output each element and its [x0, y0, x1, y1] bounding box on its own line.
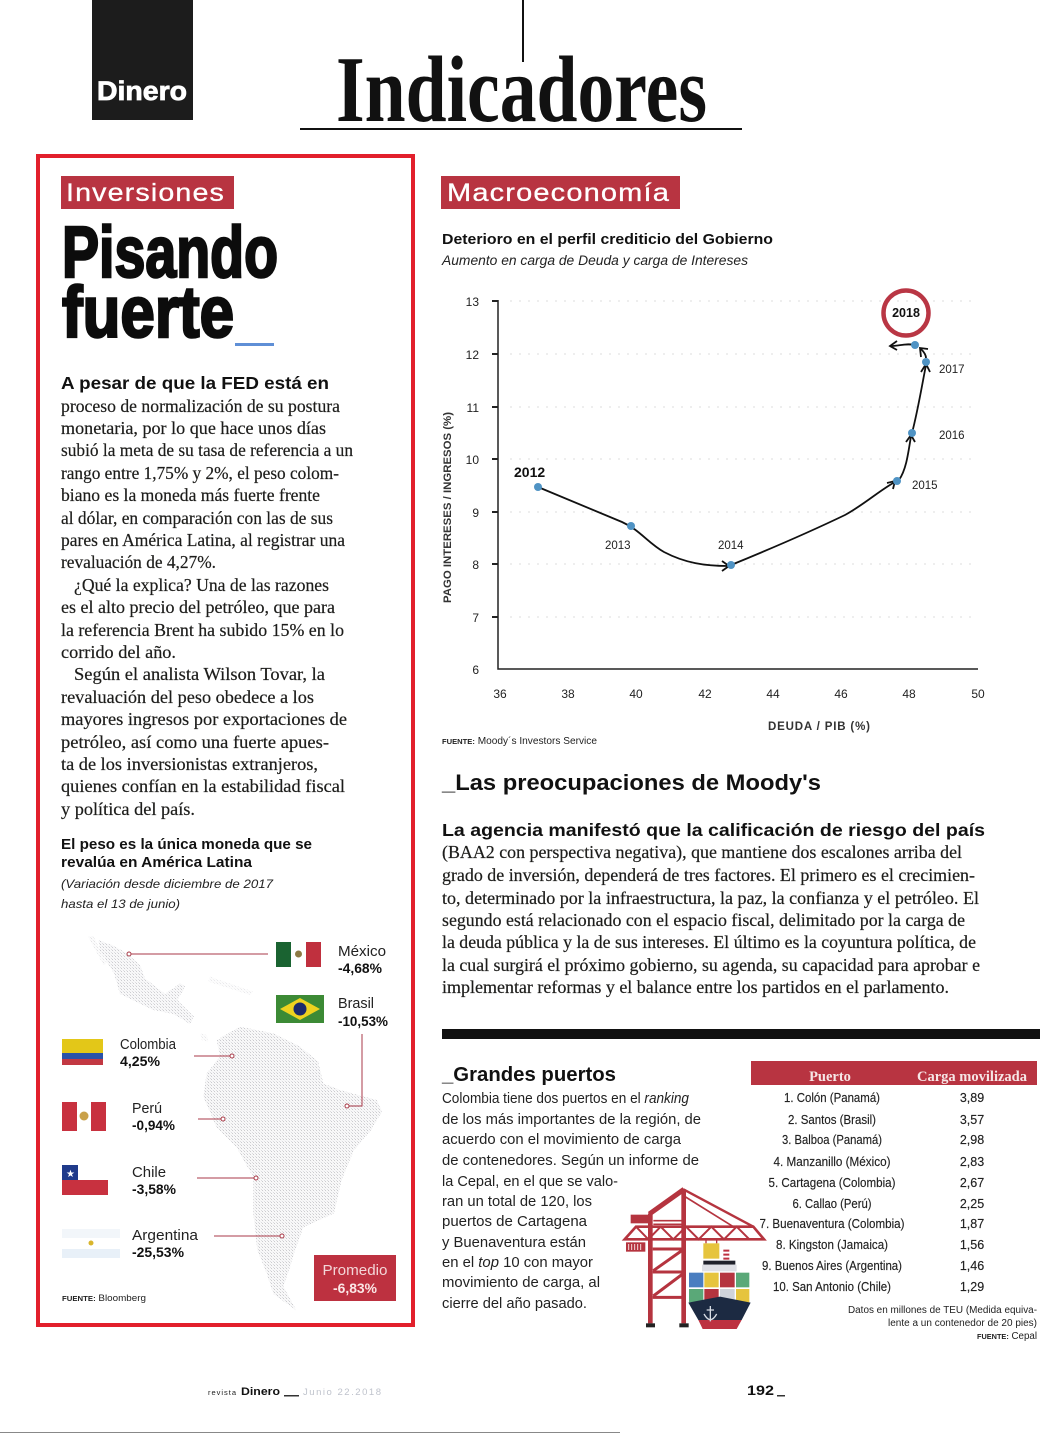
- year labels: 2014: [718, 540, 744, 552]
- table: puertos: [751, 1061, 1037, 1342]
- flag: Chile: ★: [66, 1169, 75, 1180]
- flag: México: [276, 942, 321, 967]
- source: Moody's: FUENTE: Moody´s Investors Service: [442, 735, 597, 747]
- Dinero tab: Dinero: [97, 76, 187, 106]
- text block: puertos: en el top 10 con mayor: [442, 1255, 593, 1271]
- article text: biano es la moneda más fuerte frente: [61, 485, 320, 505]
- label: Brasil: Brasil: [338, 996, 374, 1012]
- panel: inversiones: [38, 156, 413, 1325]
- map: Latin America dotted: [88, 936, 382, 1311]
- text block: Moody's: la deuda pública y la de sus intereses. El último es la coyuntura política, de: [442, 932, 976, 952]
- flag: Argentina: [62, 1229, 120, 1258]
- 2018 highlight circle: 2018: [892, 306, 920, 320]
- map heading: revalúa en América Latina: [61, 855, 253, 871]
- year labels: [514, 364, 965, 552]
- section tag: Inversiones: Inversiones: [66, 179, 225, 207]
- icon: crane and container ship: [625, 1189, 764, 1329]
- y axis values: 11: [467, 401, 479, 415]
- table rows: 10. San Antonio (Chile): [773, 1280, 891, 1294]
- map heading: [61, 837, 312, 911]
- map heading: hasta el 13 de junio): [61, 897, 180, 911]
- text block: puertos: movimiento de carga, al: [442, 1275, 600, 1291]
- table note and source: Datos en millones de TEU (Medida equiva-: [848, 1305, 1037, 1316]
- table rows: 3,57: [960, 1113, 984, 1127]
- table header: [751, 1061, 1037, 1085]
- label: Brasil: [338, 996, 388, 1029]
- flag: Chile: [62, 1165, 108, 1195]
- section tag: Macroeconomía: [441, 176, 680, 209]
- x axis values: 40: [629, 687, 643, 701]
- year labels: 2015: [912, 480, 938, 492]
- header: page tag and title: [92, 0, 742, 142]
- article text: corrido del año.: [61, 642, 176, 662]
- chart heading: Aumento en carga de Deuda y carga de Intereses: [441, 253, 748, 268]
- text block: Moody's: implementar reformas y el balance entre los partidos en el parlamento.: [442, 977, 949, 997]
- x axis values: 38: [561, 687, 575, 701]
- table rows: 2,25: [960, 1197, 984, 1211]
- text block: puertos: acuerdo con el movimiento de carga: [442, 1132, 682, 1148]
- text block: puertos: ran un total de 120, los: [442, 1194, 592, 1210]
- article text: petróleo, así como una fuerte apues-: [61, 732, 329, 752]
- curve with arrows: [538, 341, 930, 571]
- article text: la referencia Brent ha subido 15% en lo: [61, 620, 344, 640]
- text block: puertos: [442, 1091, 701, 1312]
- map connectors: [127, 952, 362, 1238]
- table rows: 2,67: [960, 1176, 984, 1190]
- article text: quienes confían en la estabilidad fiscal: [61, 776, 345, 796]
- headline: fuerte: [62, 273, 234, 353]
- y axis values: 9: [472, 506, 479, 520]
- table rows: 1,46: [960, 1259, 984, 1273]
- map heading: El peso es la única moneda que se: [61, 837, 312, 853]
- table rows: 1,56: [960, 1238, 984, 1252]
- label: México: [338, 944, 386, 976]
- x axis values: 36: [493, 687, 507, 701]
- table note and source: lente a un contenedor de 20 pies): [888, 1318, 1037, 1329]
- article text: y política del país.: [61, 799, 195, 819]
- x axis values: 46: [834, 687, 848, 701]
- callout: promedio: Promedio: [322, 1262, 388, 1279]
- label: Colombia: Colombia: [120, 1037, 177, 1053]
- table rows: 1. Colón (Panamá): [784, 1091, 880, 1105]
- text block: Moody's: (BAA2 con perspectiva negativa), que mantiene dos escalones arriba del: [442, 842, 962, 862]
- label: Chile: -3,58%: [132, 1182, 176, 1197]
- article text: ta de los inversionistas extranjeros,: [61, 754, 318, 774]
- text block: puertos: y Buenaventura están: [442, 1235, 586, 1251]
- table note and source: [848, 1305, 1037, 1342]
- 2018 highlight circle: [884, 290, 928, 336]
- text block: Moody's: grado de inversión, dependerá de tres factores. El primero es el crecimien-: [442, 865, 975, 885]
- article text: rango entre 1,75% y 2%, el peso colom-: [61, 463, 339, 483]
- data points: [534, 341, 930, 569]
- table rows: 8. Kingston (Jamaica): [776, 1238, 888, 1252]
- footer: [208, 1382, 785, 1398]
- text block: puertos: puertos de Cartagena: [442, 1214, 588, 1230]
- table header: Puerto: [809, 1069, 851, 1085]
- table rows: 6. Callao (Perú): [792, 1197, 872, 1211]
- table rows: 1,87: [960, 1217, 984, 1231]
- text block: puertos: Colombia tiene dos puertos en el ranking: [442, 1091, 689, 1107]
- table rows: 2,98: [960, 1133, 984, 1147]
- year labels: 2012: [514, 464, 545, 480]
- text block: puertos: de los más importantes de la región, de: [442, 1112, 701, 1128]
- callout: promedio: [314, 1255, 396, 1301]
- text block: puertos: cierre del año pasado.: [442, 1296, 587, 1312]
- footer: publication and date: Dinero: [241, 1386, 280, 1398]
- table rows: 2. Santos (Brasil): [788, 1113, 876, 1127]
- year labels: 2016: [939, 430, 965, 442]
- label: Colombia: 4,25%: [120, 1054, 160, 1069]
- table rows: 7. Buenaventura (Colombia): [760, 1217, 904, 1231]
- article text: pares en América Latina, al registrar una: [61, 530, 345, 550]
- label: México: -4,68%: [338, 961, 382, 976]
- label: Chile: Chile: [132, 1165, 166, 1181]
- article text: revaluación de 4,27%.: [61, 552, 216, 572]
- table rows: 3. Balboa (Panamá): [782, 1133, 882, 1147]
- y axis values: 13: [466, 295, 479, 309]
- article text: [61, 373, 353, 819]
- flag: Colombia: [62, 1039, 103, 1065]
- text block: puertos: de contenedores. Según un informe de: [442, 1153, 699, 1169]
- article text: monetaria, por lo que hace unos días: [61, 418, 326, 438]
- source: Bloomberg: FUENTE: Bloomberg: [62, 1293, 146, 1304]
- chart heading: [441, 231, 773, 268]
- section tag: Macroeconomía: Macroeconomía: [447, 179, 670, 207]
- footer: publication and date: revista: [208, 1388, 237, 1397]
- label: Perú: -0,94%: [132, 1118, 175, 1133]
- label: Colombia: [120, 1037, 177, 1069]
- y axis values: 6: [472, 663, 479, 677]
- x axis values: 48: [902, 687, 916, 701]
- text block: Moody's: [442, 820, 985, 997]
- label: Argentina: -25,53%: [132, 1245, 184, 1260]
- flag: Brasil: [276, 995, 324, 1023]
- footer: page number: 192: [747, 1382, 774, 1398]
- table header: Carga movilizada: [917, 1069, 1028, 1085]
- label: Perú: [132, 1101, 175, 1133]
- headline: [62, 213, 278, 353]
- table note and source: FUENTE: Cepal: [977, 1331, 1037, 1342]
- text block: Moody's: segundo está relacionado con el espacio fiscal, delimitado por la carga de: [442, 910, 965, 930]
- text block: Moody's: to, determinado por la infraestructura, la paz, la confianza y el petróleo. El: [442, 888, 979, 908]
- y axis values: 12: [466, 348, 479, 362]
- table rows: 3,89: [960, 1091, 984, 1105]
- year labels: 2017: [939, 364, 965, 376]
- label: Brasil: -10,53%: [338, 1014, 388, 1029]
- footer: publication and date: [208, 1386, 381, 1398]
- table rows: 1,29: [960, 1280, 984, 1294]
- text block: Moody's: la cual surgirá el próximo gobierno, su agenda, su capacidad para aprobar e: [442, 955, 980, 975]
- text block: puertos: la Cepal, en el que se valo-: [442, 1174, 618, 1190]
- x axis values: 42: [698, 687, 712, 701]
- article text: al dólar, en comparación con las de sus: [61, 508, 333, 528]
- article text: proceso de normalización de su postura: [61, 396, 340, 416]
- x axis values: 50: [971, 687, 985, 701]
- x axis values: [493, 687, 985, 701]
- article text: Según el analista Wilson Tovar, la: [74, 664, 325, 684]
- article text: revaluación del peso obedece a los: [61, 687, 314, 707]
- y axis values: 7: [472, 611, 479, 625]
- label: Chile: [132, 1165, 176, 1197]
- label: Argentina: Argentina: [132, 1228, 199, 1244]
- headline: Pisando: [62, 213, 278, 293]
- article text: subió la meta de su tasa de referencia a un: [61, 440, 353, 460]
- y axis title: PAGO INTERESES / INGRESOS (%): [442, 412, 454, 603]
- table rows: 2,83: [960, 1155, 984, 1169]
- heading: grandes puertos: _Grandes puertos: [441, 1063, 616, 1086]
- x axis values: 44: [766, 687, 780, 701]
- table rows: 5. Cartagena (Colombia): [768, 1176, 896, 1190]
- table rows: 9. Buenos Aires (Argentina): [762, 1259, 902, 1273]
- x axis title: DEUDA / PIB (%): [768, 721, 870, 733]
- map heading: (Variación desde diciembre de 2017: [61, 877, 274, 891]
- title: Indicadores: [336, 38, 707, 142]
- label: Argentina: [132, 1228, 199, 1260]
- footer: publication and date: Junio 22.2018: [303, 1387, 381, 1398]
- callout: promedio: -6,83%: [333, 1281, 377, 1296]
- table rows: [760, 1091, 984, 1294]
- Dinero tab: [92, 0, 193, 120]
- label: Perú: Perú: [132, 1101, 162, 1117]
- article text: mayores ingresos por exportaciones de: [61, 709, 347, 729]
- year labels: 2013: [605, 540, 631, 552]
- article text: A pesar de que la FED está en: [61, 373, 329, 393]
- y axis values: [466, 295, 479, 677]
- y axis values: 8: [472, 558, 479, 572]
- flag: Perú: [62, 1102, 106, 1131]
- article text: es el alto precio del petróleo, que para: [61, 597, 335, 617]
- table rows: 4. Manzanillo (México): [774, 1155, 890, 1169]
- line chart: deuda vs intereses: [442, 290, 985, 733]
- label: México: México: [338, 944, 386, 960]
- heading: preocupaciones: _Las preocupaciones de Moody's: [441, 770, 821, 795]
- section tag: Inversiones: [61, 176, 234, 209]
- text block: Moody's: La agencia manifestó que la calificación de riesgo del país: [442, 820, 985, 840]
- footer: page number: [747, 1382, 785, 1398]
- y axis values: 10: [466, 453, 479, 467]
- chart heading: Deterioro en el perfil crediticio del Gobierno: [442, 231, 773, 248]
- article text: ¿Qué la explica? Una de las razones: [74, 575, 329, 595]
